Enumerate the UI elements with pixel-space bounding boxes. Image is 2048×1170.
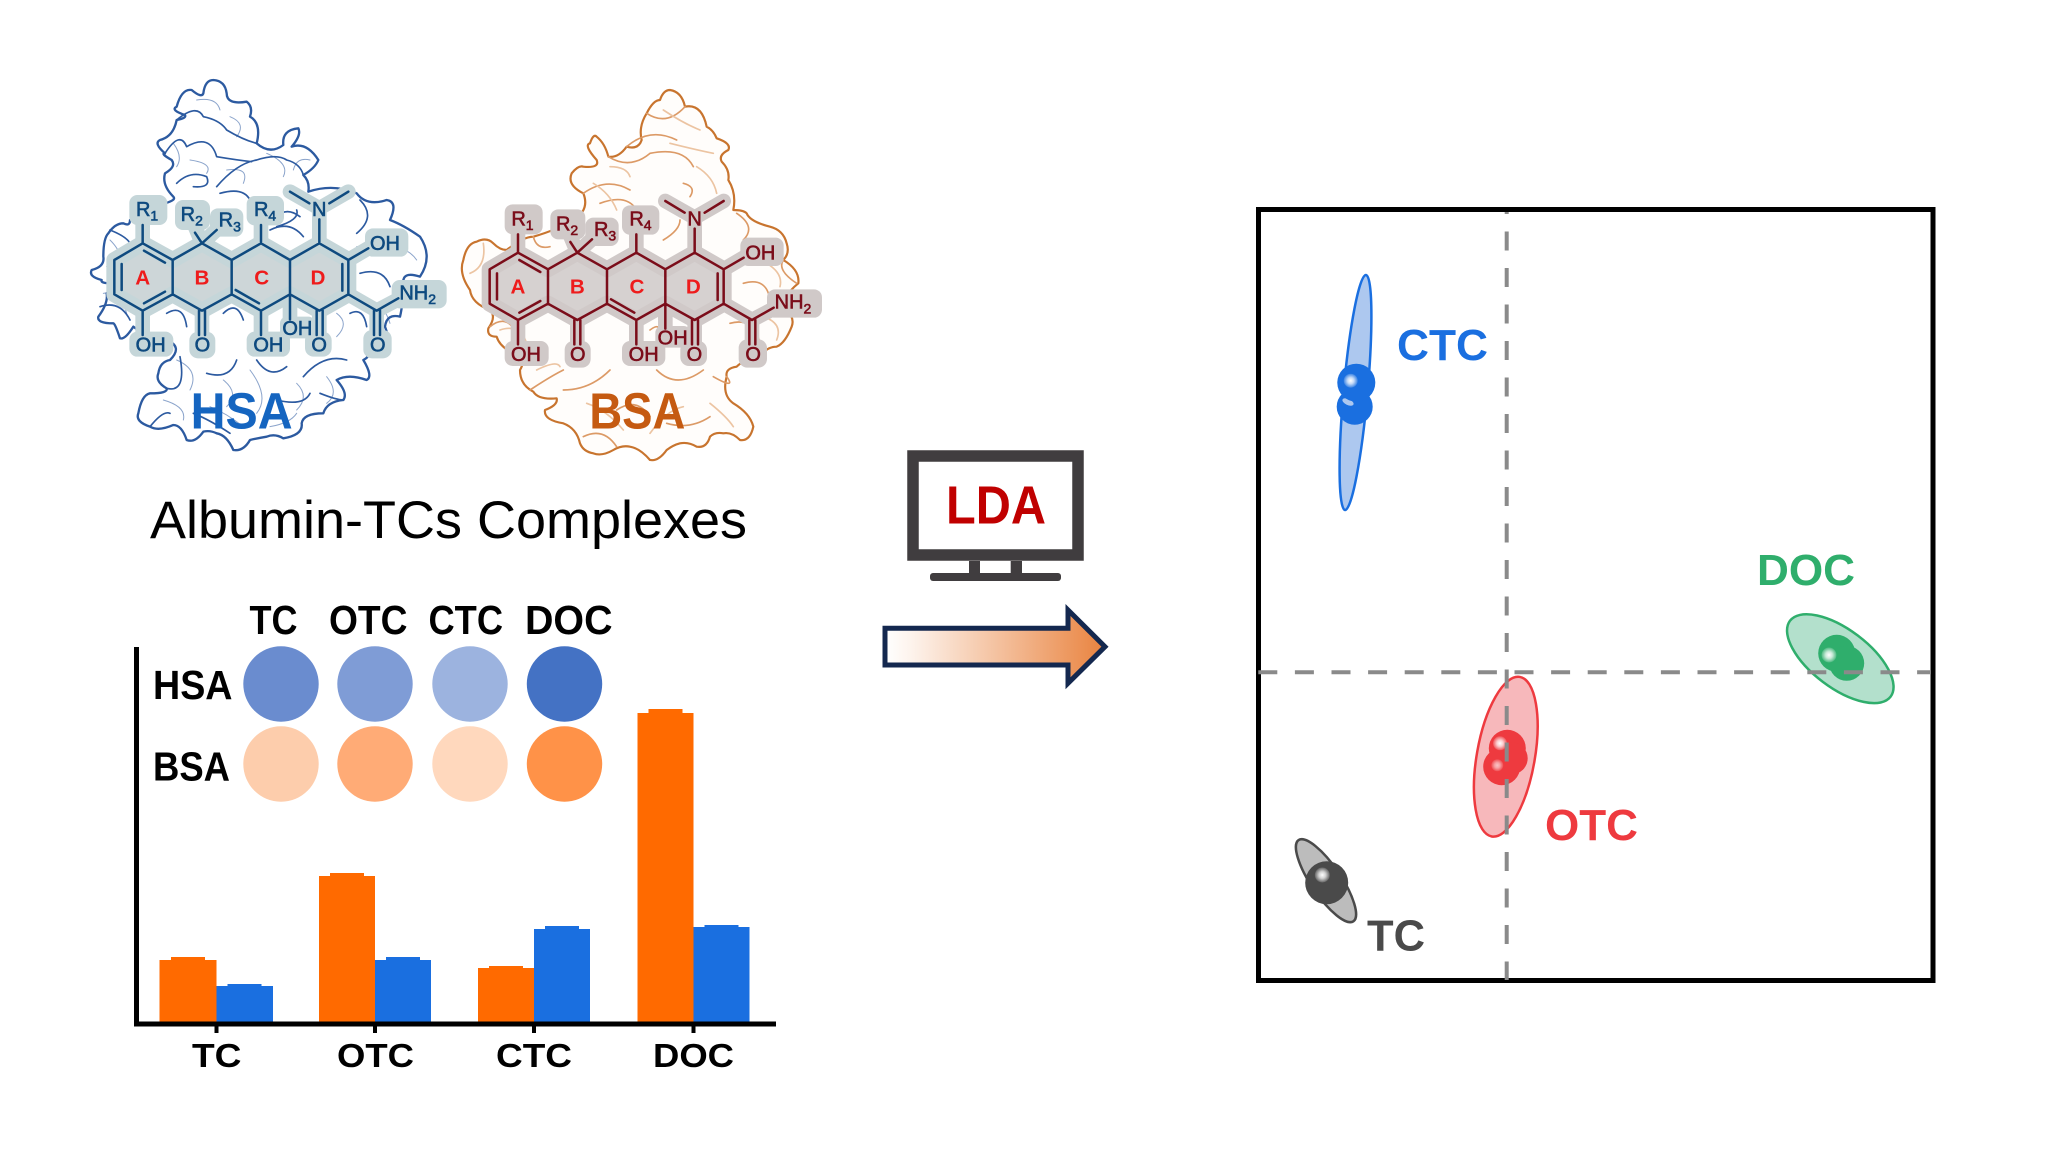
HSA molecule atom labels: N	[312, 199, 326, 221]
HSA molecule atom labels	[136, 199, 436, 357]
colour array column labels: OTC	[329, 597, 408, 643]
colour array row labels	[153, 662, 232, 790]
bar chart category labels: OTC	[337, 1037, 414, 1074]
cluster: CTC: CTC	[1397, 321, 1488, 370]
icon: LDA monitor: LDA	[946, 476, 1046, 536]
HSA molecule atom labels: 2	[428, 291, 436, 307]
BSA ring letters: D	[686, 276, 701, 299]
BSA molecule atom labels: 2	[570, 222, 578, 238]
HSA molecule atom labels: 3	[233, 218, 241, 234]
BSA molecule atom labels: OH	[629, 344, 659, 366]
BSA ring letters	[511, 276, 701, 299]
HSA label: HSA	[191, 383, 293, 440]
heading: Albumin-TCs Complexes: Albumin-TCs Complexes	[150, 491, 747, 550]
orange bars with error caps	[160, 709, 694, 1023]
colour array column labels: TC	[250, 597, 298, 643]
chart axes	[134, 647, 776, 1024]
HSA molecule atom labels: 4	[268, 208, 276, 224]
cluster: DOC: DOC	[1757, 546, 1855, 595]
HSA ring letters: D	[311, 266, 326, 289]
BSA molecule atom labels: N	[687, 208, 702, 230]
colour array row labels: BSA	[153, 744, 230, 790]
plot frame	[1258, 210, 1933, 980]
dashed axes	[1258, 212, 1931, 980]
BSA ring letters: C	[630, 276, 645, 299]
BSA molecule atom labels: R	[511, 208, 526, 230]
BSA molecule atom labels: 4	[644, 217, 652, 233]
colour array column labels	[250, 597, 612, 643]
panel: HSA complex	[91, 80, 447, 450]
cluster: CTC	[1333, 274, 1488, 511]
cluster: DOC	[1757, 546, 1908, 720]
BSA molecule atom labels: 1	[526, 217, 534, 233]
cluster: OTC	[1463, 672, 1638, 850]
arrow	[885, 610, 1105, 683]
BSA molecule atom labels: 3	[608, 228, 616, 244]
HSA ring letters	[135, 266, 326, 289]
HSA molecule atom labels: OH	[253, 335, 283, 357]
HSA molecule atom labels: 2	[195, 213, 203, 229]
cluster: OTC: OTC	[1545, 801, 1638, 850]
BSA ring letters: B	[570, 276, 585, 299]
HSA molecule atom labels: OH	[282, 318, 312, 340]
BSA molecule atom labels: OH	[745, 242, 775, 264]
cluster: TC: TC	[1367, 912, 1425, 961]
icon: LDA monitor	[913, 456, 1078, 581]
HSA molecule atom labels: NH	[399, 282, 428, 304]
HSA molecule bonds	[114, 192, 398, 335]
panel: colour array and bar chart	[134, 597, 776, 1074]
colour array column labels: CTC	[428, 597, 503, 643]
HSA molecule atom labels: O	[195, 335, 210, 357]
BSA molecule bonds	[490, 201, 774, 344]
HSA ring letters: A	[135, 266, 150, 289]
HSA molecule atom labels: R	[219, 210, 233, 232]
HSA protein surface	[91, 80, 427, 450]
colour array row labels: HSA	[153, 662, 232, 708]
bar chart category labels: DOC	[653, 1037, 734, 1074]
HSA molecule atom labels: R	[181, 204, 195, 226]
HSA molecule atom labels: R	[136, 199, 150, 221]
BSA molecule atom labels: O	[745, 344, 761, 366]
HSA molecule atom labels: O	[370, 335, 386, 357]
BSA molecule atom labels: R	[556, 213, 570, 235]
BSA label: BSA	[589, 383, 685, 440]
HSA molecule atom labels: OH	[370, 233, 400, 255]
BSA molecule atom labels	[511, 208, 812, 366]
panel: LDA score plot	[1258, 210, 1933, 980]
BSA molecule atom labels: R	[629, 208, 644, 230]
HSA molecule atom labels: O	[311, 335, 327, 357]
HSA molecule halo	[114, 192, 447, 358]
blue bars with error caps	[216, 925, 750, 1023]
bar chart category labels	[192, 1037, 734, 1074]
bar chart category labels: CTC	[496, 1037, 572, 1074]
BSA ring letters: A	[511, 276, 526, 299]
BSA molecule atom labels: R	[594, 219, 608, 241]
HSA molecule atom labels: OH	[136, 335, 166, 357]
HSA colour spots	[243, 646, 602, 722]
cluster: TC	[1286, 832, 1425, 961]
HSA ring letters: C	[254, 266, 269, 289]
BSA molecule atom labels: O	[570, 344, 586, 366]
BSA molecule atom labels: OH	[658, 327, 688, 349]
BSA colour spots	[243, 726, 602, 802]
panel: BSA complex	[462, 90, 822, 460]
BSA molecule atom labels: 2	[804, 300, 812, 316]
BSA protein surface	[462, 90, 798, 460]
BSA molecule atom labels: OH	[511, 344, 541, 366]
HSA ring letters: B	[195, 266, 209, 289]
HSA molecule atom labels: 1	[150, 208, 158, 224]
BSA molecule halo	[490, 201, 822, 368]
BSA molecule atom labels: NH	[775, 292, 804, 314]
bar chart category labels: TC	[192, 1037, 242, 1074]
colour array column labels: DOC	[525, 597, 612, 643]
BSA molecule atom labels: O	[687, 344, 702, 366]
HSA molecule atom labels: R	[254, 199, 268, 221]
